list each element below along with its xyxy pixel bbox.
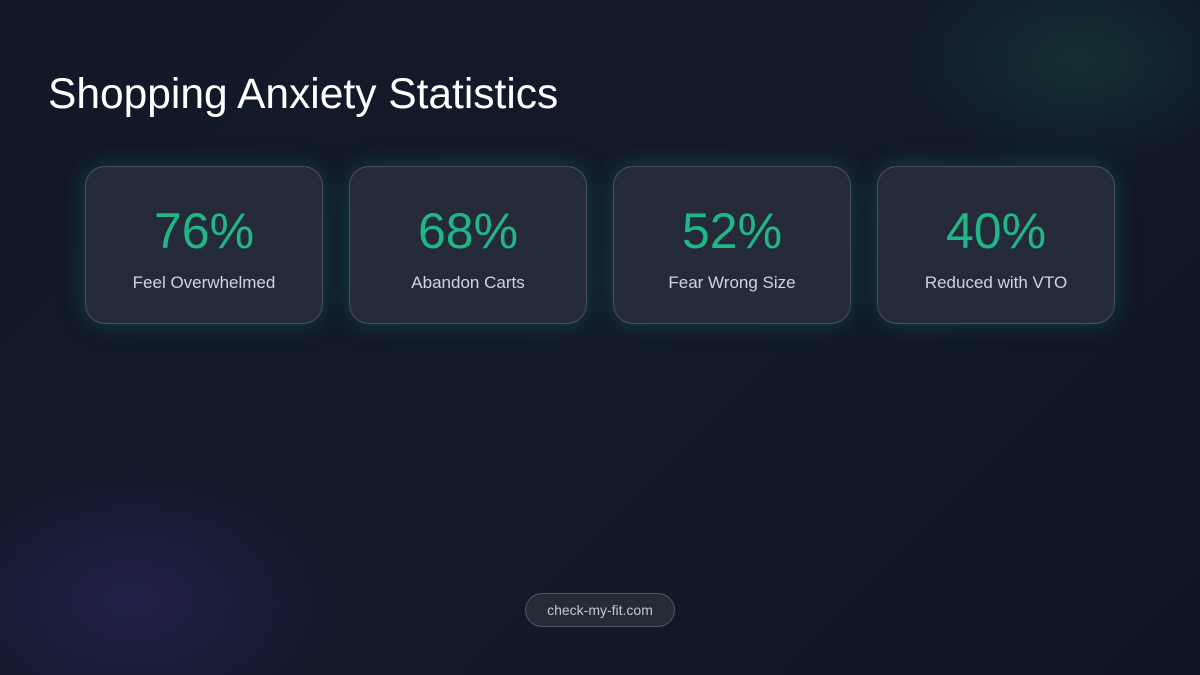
card: reduced with VTO [877,166,1115,324]
card: reduced with VTO: Reduced with VTO [925,273,1067,292]
card: feel overwhelmed: Feel Overwhelmed [133,273,275,292]
card: fear wrong size: 52% [682,203,782,259]
card: abandon carts [349,166,587,324]
card: fear wrong size [613,166,851,324]
card: abandon carts: 68% [418,203,518,259]
card: feel overwhelmed: 76% [154,203,254,259]
card: abandon carts: Abandon Carts [411,273,525,292]
card: fear wrong size: Fear Wrong Size [668,273,796,292]
card: feel overwhelmed [85,166,323,324]
card: reduced with VTO: 40% [946,203,1046,259]
footer url pill [525,593,675,627]
title: Shopping Anxiety Statistics [48,71,558,118]
footer url pill: check-my-fit.com [547,602,653,618]
